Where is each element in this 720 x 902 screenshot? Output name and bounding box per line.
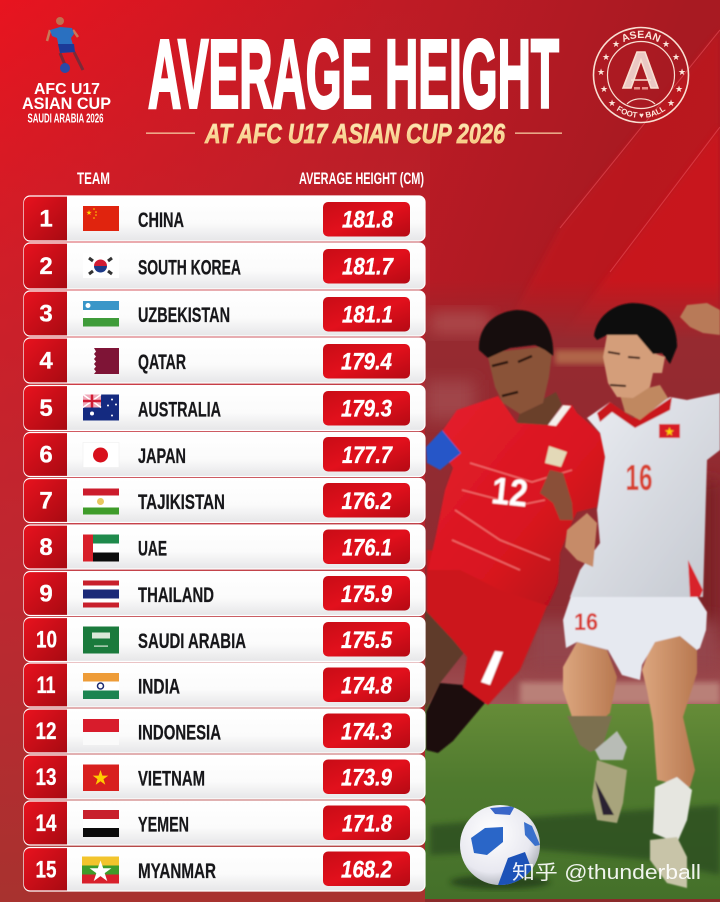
row: Thailand: [24, 572, 425, 616]
boot left: [592, 760, 627, 823]
flag: UAE: [83, 534, 119, 562]
row: Australia: [24, 386, 425, 430]
flag: Australia: [83, 394, 119, 420]
row: Tajikistan: [24, 478, 425, 522]
column header: team: TEAM: [77, 170, 110, 188]
row: India: 11: [36, 672, 56, 699]
row: South Korea: [24, 243, 425, 289]
row: Japan: JAPAN: [138, 445, 186, 468]
row: Japan: [24, 432, 425, 476]
row: Myanmar: 15: [36, 856, 56, 884]
row: UAE: [24, 525, 425, 569]
row: China: 1: [39, 206, 53, 232]
grass pitch: [425, 704, 720, 902]
jersey flag badge: [659, 424, 680, 438]
row: Yemen: 14: [36, 810, 57, 837]
badge stars: [597, 40, 686, 109]
row: Tajikistan: 176.2: [342, 488, 392, 515]
row: Vietnam: 13: [36, 764, 56, 791]
boot right: [650, 837, 687, 888]
flag: Saudi Arabia: [83, 626, 119, 654]
right leg: [642, 635, 697, 787]
row: Indonesia: INDONESIA: [138, 722, 221, 744]
row: Thailand: 175.9: [341, 581, 392, 608]
face: [487, 347, 552, 414]
row: India: 174.8: [341, 672, 392, 700]
row: UAE: UAE: [138, 538, 167, 560]
badge stars: ★: [672, 53, 680, 63]
player: red jersey number 12: [425, 310, 606, 753]
row: UAE: 176.1: [342, 534, 392, 562]
row: Myanmar: MYANMAR: [138, 860, 216, 883]
number on shorts: [481, 651, 503, 685]
row: Vietnam: VIETNAM: [138, 768, 205, 790]
row: South Korea: 2: [39, 253, 53, 280]
player: white jersey number 16: [563, 303, 720, 888]
badge stars: ★: [608, 99, 616, 109]
row: Saudi Arabia: [24, 618, 425, 662]
jersey flag badge: ★: [665, 427, 674, 438]
row: Uzbekistan: 181.1: [342, 302, 393, 328]
crest: [545, 446, 567, 467]
flag: China: [83, 206, 119, 231]
row: Saudi Arabia: SAUDI ARABIA: [138, 630, 246, 653]
flag: Uzbekistan: [83, 301, 119, 326]
row: Uzbekistan: [24, 291, 425, 336]
left leg: [425, 610, 466, 712]
badge ball arc: [627, 99, 655, 104]
badge stars: ★: [678, 68, 686, 78]
row: Vietnam: 173.9: [341, 764, 392, 792]
badge stars: ★: [675, 85, 683, 95]
armband: [426, 430, 461, 470]
tournament logo: [22, 17, 111, 126]
row: Australia: 179.3: [341, 396, 392, 422]
flag: Indonesia: [83, 719, 119, 745]
badge top text: ASEAN: [623, 30, 661, 42]
row: South Korea: SOUTH KOREA: [138, 256, 241, 280]
hair: [594, 303, 677, 364]
logo wordmark: AFC U17: [34, 81, 100, 98]
flag: Japan: [83, 442, 119, 468]
row: Vietnam: [24, 755, 425, 799]
flag: China: ★: [86, 209, 92, 217]
watermark: 知乎 @thunderball: [512, 861, 701, 884]
tournament logo: SAUDI ARABIA 2026: [28, 110, 104, 126]
row: Myanmar: 168.2: [341, 856, 392, 884]
flag: Thailand: [83, 580, 119, 608]
row: South Korea: 181.7: [342, 254, 394, 280]
row: China: 181.8: [342, 206, 393, 234]
lower left leg: [567, 716, 612, 752]
badge stars: ★: [662, 40, 670, 50]
badge stars: ★: [597, 68, 605, 78]
badge stars: ★: [667, 99, 675, 109]
row: India: [24, 663, 425, 707]
flag: Myanmar: [82, 856, 119, 884]
flag: Qatar: [94, 348, 119, 374]
flag: Tajikistan: [83, 488, 119, 514]
row: Saudi Arabia: 10: [36, 626, 57, 654]
row: Uzbekistan: 3: [39, 300, 53, 328]
jersey: [570, 393, 720, 597]
row: Yemen: [24, 801, 425, 845]
row: Japan: 6: [39, 442, 53, 468]
badge stars: ★: [612, 40, 620, 50]
flag: Yemen: [83, 810, 119, 837]
badge stars: ★: [602, 53, 610, 63]
badge letter A: [623, 52, 658, 88]
row: Indonesia: 174.3: [341, 718, 392, 746]
row: China: [24, 196, 425, 241]
row: Thailand: THAILAND: [138, 584, 214, 607]
flag: South Korea: [83, 253, 119, 278]
stadium backdrop: [425, 280, 720, 710]
row: Indonesia: [24, 709, 425, 753]
row: Australia: AUSTRALIA: [138, 398, 221, 422]
row: Thailand: 9: [39, 580, 53, 608]
hand on arm: [565, 513, 597, 567]
row: Qatar: [24, 338, 425, 383]
face: [603, 333, 665, 398]
hand: [540, 470, 573, 520]
row: Tajikistan: TAJIKISTAN: [138, 491, 225, 514]
football: [460, 805, 540, 890]
row: Uzbekistan: UZBEKISTAN: [138, 304, 230, 327]
row: Tajikistan: 7: [39, 488, 53, 514]
row: Qatar: 4: [39, 348, 53, 374]
badge bottom text: FOOT ♥ BALL: [616, 106, 666, 118]
neck: [620, 385, 668, 420]
row: Myanmar: [24, 848, 425, 891]
flag: Vietnam: [83, 764, 119, 791]
sock left: [595, 731, 627, 760]
logo player figure: [47, 17, 83, 73]
row: Australia: 5: [39, 395, 53, 422]
shorts number: 16: [574, 609, 598, 636]
row: Japan: 177.7: [342, 442, 393, 469]
lower leg in shadow: [426, 683, 485, 753]
left leg: [563, 642, 617, 727]
shorts: [563, 590, 707, 680]
raised fist: [680, 303, 720, 335]
neck and collar: [517, 392, 562, 425]
number 16: 16: [626, 457, 652, 498]
tournament logo: ASIAN CUP: [22, 95, 111, 113]
row: UAE: 8: [39, 534, 53, 561]
row: Yemen: YEMEN: [138, 814, 189, 836]
flag: India: [83, 673, 119, 699]
subtitle: AT AFC U17 ASIAN CUP 2026: [204, 118, 505, 149]
row: Indonesia: 12: [36, 718, 56, 745]
badge stars: ★: [600, 85, 608, 95]
shorts: [427, 550, 556, 705]
number 12: 12: [490, 470, 530, 516]
ASEAN football badge: [592, 26, 690, 124]
row: Qatar: 179.4: [341, 348, 392, 376]
jersey: [428, 396, 606, 606]
hair: [479, 310, 553, 358]
row: China: CHINA: [138, 209, 184, 232]
sock right: [653, 777, 692, 843]
row: Saudi Arabia: 175.5: [341, 627, 392, 654]
row: Yemen: 171.8: [342, 810, 392, 838]
column header: average height: AVERAGE HEIGHT (CM): [299, 170, 424, 188]
row: Qatar: QATAR: [138, 351, 186, 374]
row: India: INDIA: [138, 676, 180, 698]
